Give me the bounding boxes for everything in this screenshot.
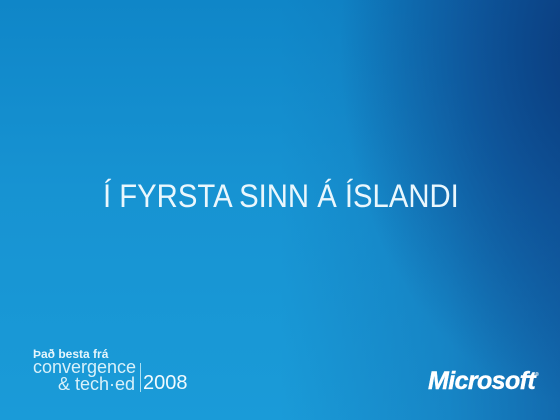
tech-ed wordmark: & tech·ed [58, 374, 135, 394]
tagline: Það besta frá [33, 347, 108, 361]
Microsoft logo: Microsoft® [428, 367, 539, 395]
year: 2008 [143, 372, 188, 394]
event logo: convergence & tech-ed 2008 [33, 347, 188, 394]
convergence wordmark: convergence [33, 357, 136, 377]
logo divider [140, 363, 141, 392]
title: Í FYRSTA SINN Á ÍSLANDI [103, 178, 459, 214]
